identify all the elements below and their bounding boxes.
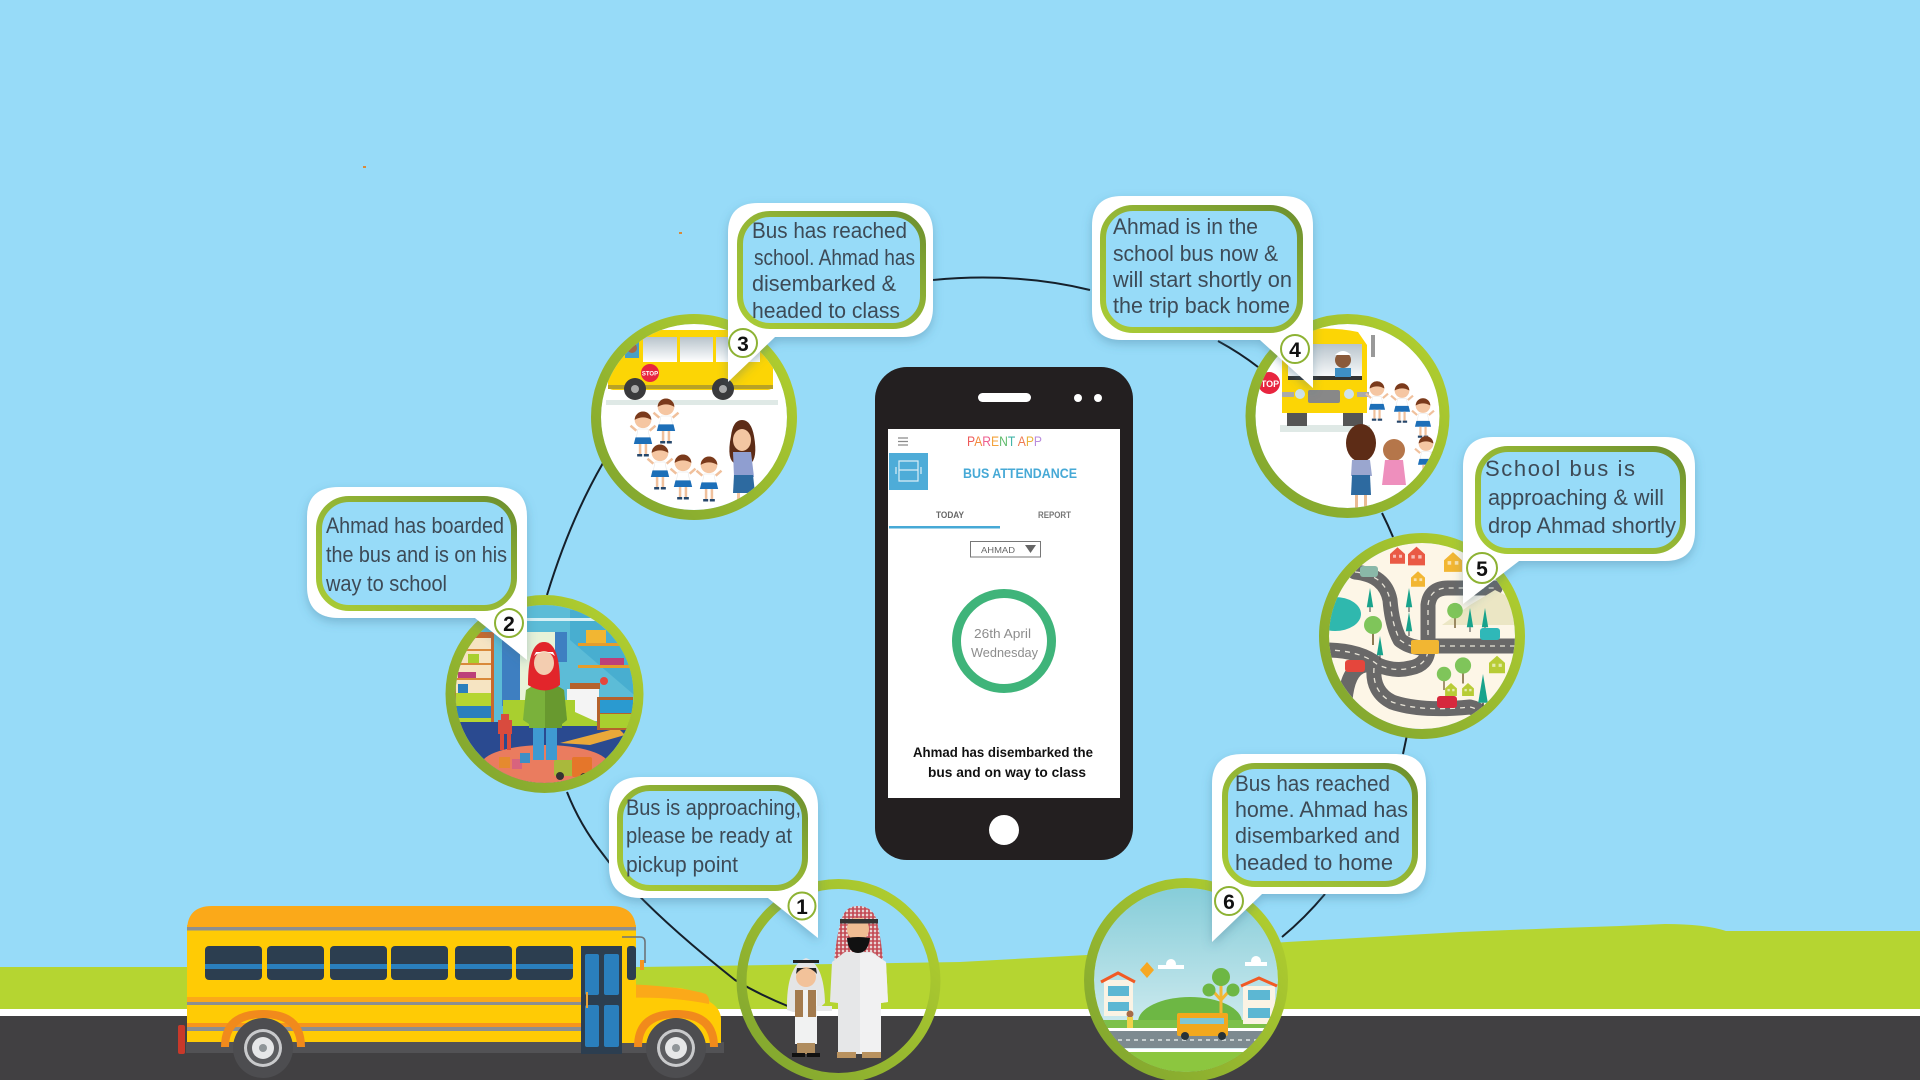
number badge 6: 6 [1223, 891, 1235, 914]
circle 5: road map [1309, 538, 1530, 734]
number badge 1: 1 [796, 896, 808, 919]
date ring: Wednesday [971, 645, 1038, 660]
callout 4: will start shortly on [1112, 267, 1292, 292]
side-view yellow bus [606, 330, 778, 405]
bookcase [453, 632, 494, 732]
girl [523, 642, 567, 760]
phone [875, 367, 1133, 860]
callout 6 [1212, 754, 1426, 942]
callout 4 [1092, 196, 1313, 388]
bed [503, 683, 600, 726]
home button [989, 815, 1019, 845]
circle 1: father and son [742, 884, 936, 1078]
menu icon [898, 438, 908, 445]
callout 3: school. Ahmad has [754, 245, 915, 270]
number badge 4 [1281, 335, 1309, 363]
roads [1329, 565, 1515, 716]
left house [1101, 973, 1135, 1016]
app title: PARENT APP [967, 433, 1042, 449]
man [830, 906, 888, 1058]
callout 2: Ahmad has boarded [326, 513, 504, 538]
tabs: REPORT [1038, 510, 1071, 520]
callout 3: headed to class [752, 298, 900, 323]
callout 5: drop Ahmad shortly [1488, 513, 1676, 538]
callout 4: Ahmad is in the [1113, 214, 1258, 239]
floor and rug [460, 722, 628, 783]
hills [1442, 590, 1515, 625]
clouds and kite [1140, 956, 1267, 978]
date ring [956, 594, 1052, 688]
cars [1345, 566, 1500, 708]
window and curtain [502, 630, 567, 706]
teacher [729, 420, 755, 507]
callout 5: approaching & will [1488, 485, 1664, 510]
tree [1202, 968, 1240, 1015]
student dropdown [970, 542, 1040, 557]
callout 5: School bus is [1485, 456, 1635, 481]
speaker and camera [978, 393, 1102, 402]
callout 2 [307, 487, 527, 660]
small school bus [1177, 1013, 1228, 1040]
number badge 4: 4 [1289, 339, 1301, 362]
callout 6: headed to home [1235, 850, 1393, 875]
callout 6: disembarked and [1235, 823, 1400, 848]
callout 2: the bus and is on his [326, 542, 507, 567]
circle 4: bus front and children [1250, 319, 1444, 513]
circle 6: home neighbourhood [1089, 883, 1283, 1080]
screen [888, 429, 1120, 798]
bus body [187, 925, 636, 1042]
front-view yellow bus: TOP [1261, 379, 1279, 389]
status message: bus and on way to class [928, 764, 1086, 780]
callout 4: the trip back home [1113, 293, 1290, 318]
child by the road [1126, 1010, 1134, 1028]
date ring: 26th April [974, 626, 1031, 641]
phone body [875, 367, 1133, 860]
callout 1: pickup point [626, 852, 738, 877]
callout 3: Bus has reached [752, 218, 907, 243]
children facing bus [1366, 381, 1437, 476]
callout 1: please be ready at [626, 823, 792, 848]
callout 1: Bus is approaching, [626, 795, 801, 820]
number badge 3: 3 [737, 333, 749, 356]
connecting route line [547, 278, 1407, 1007]
front-view yellow bus [1258, 328, 1375, 432]
road [1108, 1028, 1264, 1052]
tabs: TODAY [936, 510, 964, 520]
number badge 5: 5 [1476, 558, 1488, 581]
rear wheel [221, 1010, 305, 1078]
tabs [889, 510, 1071, 528]
status message: Ahmad has disembarked the [913, 744, 1093, 760]
circle 3: children leaving bus at school [596, 319, 792, 515]
bus lower skirt [186, 1042, 724, 1053]
side-view yellow bus: STOP [642, 372, 658, 378]
callout 6: Bus has reached [1235, 771, 1390, 796]
children [630, 398, 722, 502]
callout 4: school bus now & [1113, 241, 1278, 266]
right house [1241, 978, 1277, 1024]
bus icon tile [889, 453, 928, 490]
toys [498, 714, 592, 781]
bus rear bumper [178, 1025, 185, 1054]
grass [0, 924, 1920, 1012]
front wheel [634, 1010, 718, 1078]
circle 2: girl in room [450, 600, 640, 792]
callout 2: way to school [325, 571, 447, 596]
callout 1 [609, 777, 818, 938]
callout 5 [1463, 437, 1695, 604]
bus mirror [622, 937, 645, 963]
houses [1390, 547, 1505, 696]
number badge 2 [495, 609, 523, 637]
number badge 3 [729, 329, 757, 357]
screen heading: BUS ATTENDANCE [963, 466, 1077, 481]
bus windows [205, 946, 636, 980]
callout 3 [728, 203, 933, 382]
callout 3: disembarked & [752, 271, 896, 296]
number badge 1 [788, 892, 816, 920]
school bus [178, 906, 724, 1078]
hills and lawn [1138, 997, 1242, 1020]
student dropdown: AHMAD [981, 545, 1015, 555]
teacher from behind [1346, 424, 1376, 509]
number badge 5 [1467, 553, 1497, 583]
bus hood [620, 984, 721, 1043]
bus door [581, 946, 622, 1054]
road [0, 1009, 1920, 1080]
pink child [1382, 439, 1406, 485]
status message [913, 744, 1093, 780]
callout 6: home. Ahmad has [1235, 797, 1408, 822]
boy [787, 958, 832, 1057]
number badge 6 [1215, 887, 1243, 915]
number badge 2: 2 [503, 613, 515, 636]
specks [363, 166, 682, 234]
nightstand [597, 677, 633, 730]
wall shelves [578, 630, 630, 668]
trees [1364, 588, 1488, 710]
lake [1329, 597, 1361, 631]
